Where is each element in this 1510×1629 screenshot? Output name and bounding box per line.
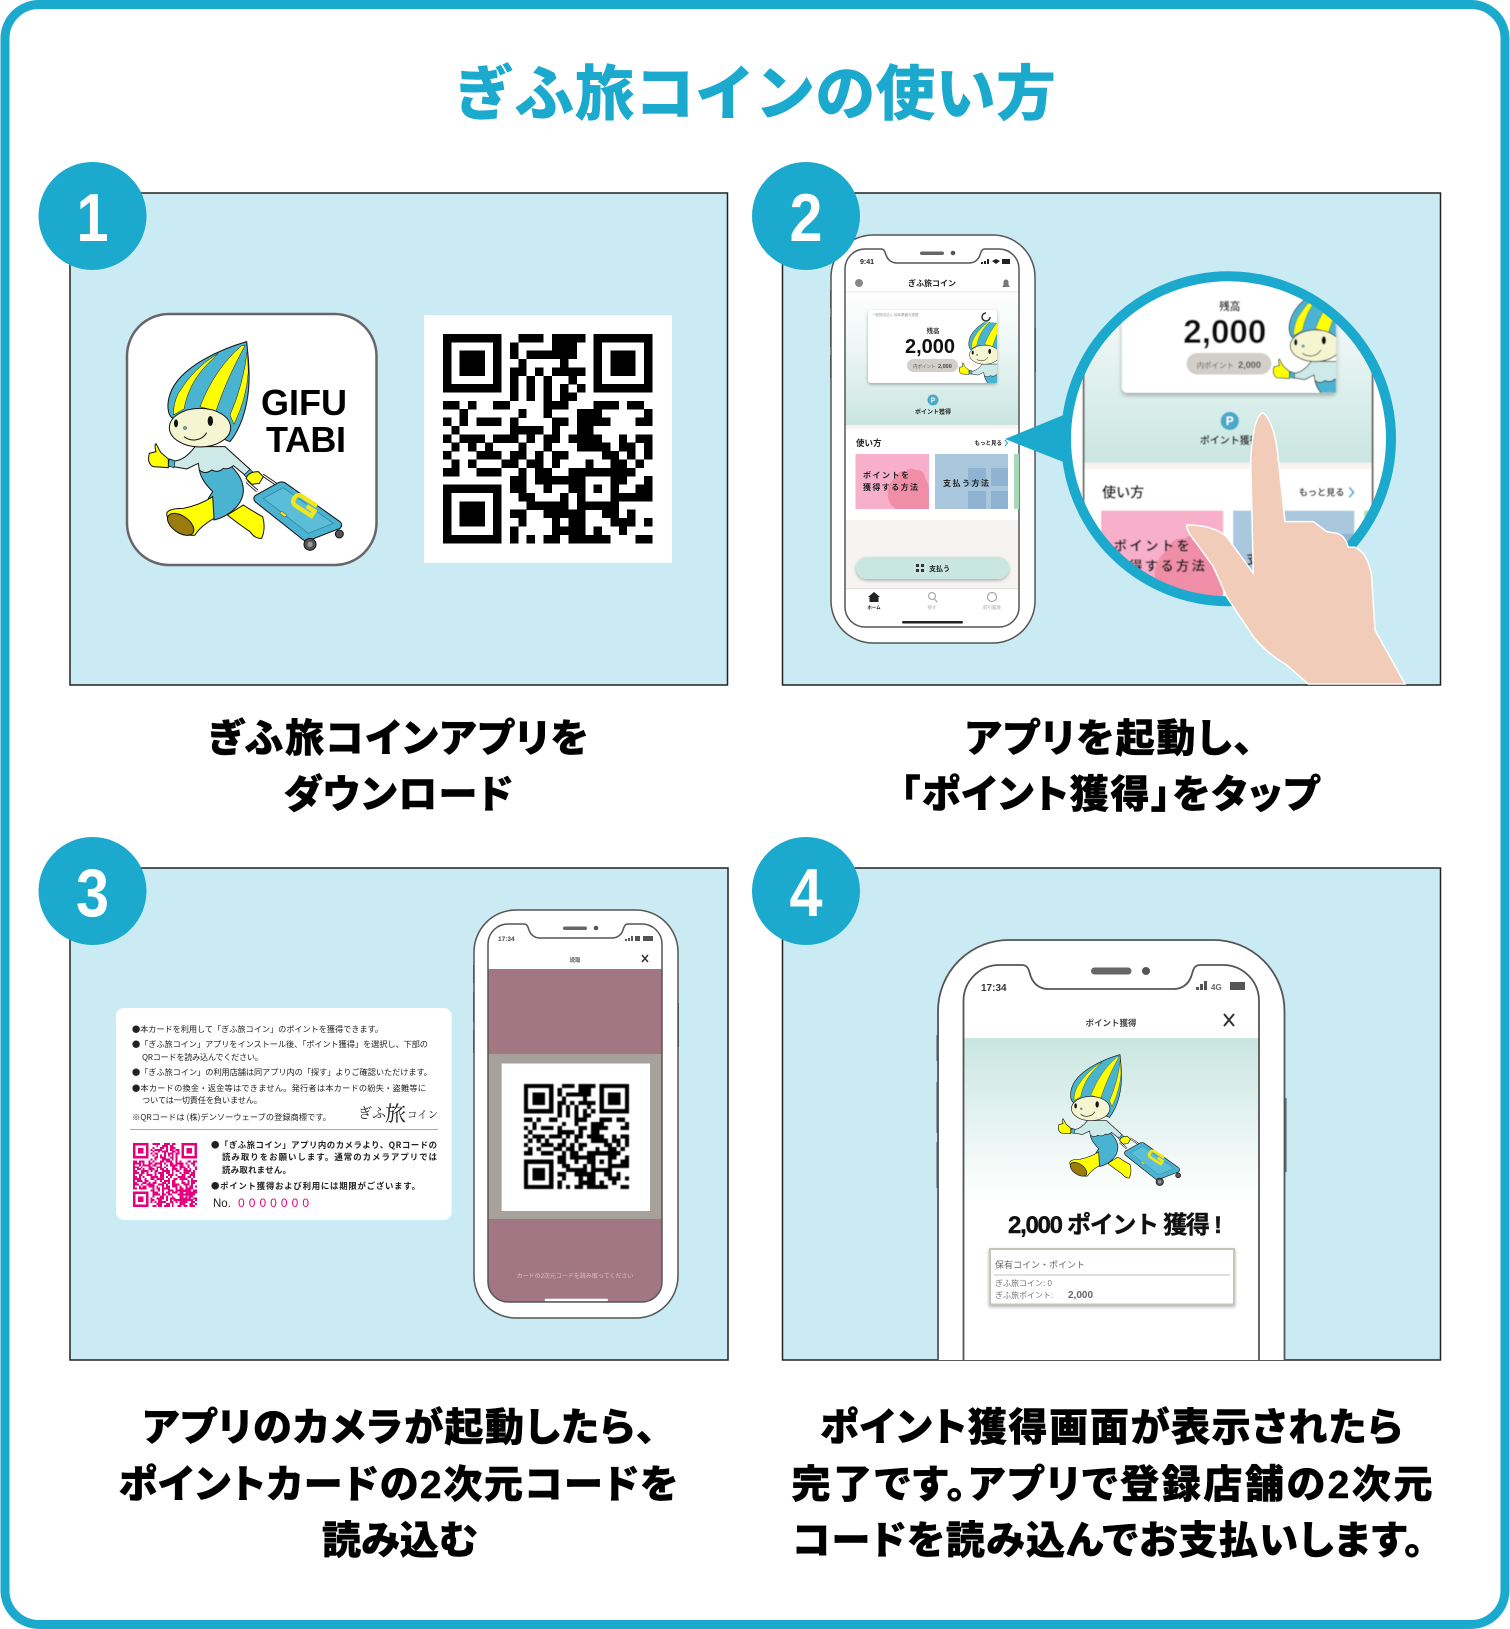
how-to heading: もっと見る — [974, 440, 1002, 447]
circle number 3: 3 — [76, 855, 109, 931]
coin logo: コイン — [407, 1109, 438, 1121]
caption: step 4: 完了です。アプリで登録店舗の2次元 — [792, 1464, 1432, 1507]
bottom navigation: 探す — [928, 604, 937, 611]
balance box: ぎふ旅コイン: 0 — [995, 1278, 1052, 1288]
magnifier callout: ポイントを — [1114, 538, 1190, 553]
icon: hand — [1187, 413, 1405, 684]
balance card — [866, 310, 999, 386]
caption: step 2: アプリを起動し、 — [965, 718, 1253, 761]
balance box: 保有コイン・ポイント — [995, 1259, 1085, 1270]
panel: step 1 — [70, 193, 728, 685]
magnifier callout: 支払う方法 — [1246, 551, 1323, 567]
pay button — [856, 557, 1009, 579]
panel: step 4 — [782, 867, 1442, 1361]
balance card: 残高 — [926, 326, 940, 335]
coin logo — [358, 1102, 438, 1126]
circle number 4: 4 — [790, 855, 823, 931]
caption: step 3: ポイントカードの2次元コードを — [118, 1464, 678, 1507]
caption: step 4 — [792, 1406, 1432, 1563]
card instructions — [211, 1139, 438, 1192]
card instructions: 読み取りをお願いします。通常のカメラアプリでは — [222, 1151, 438, 1163]
card notes: ●本カードの換金・返金等はできません。発行者は本カードの紛失・盗難等に — [132, 1082, 426, 1094]
phone with result — [936, 939, 1286, 1360]
caption: step 1 — [208, 717, 588, 817]
serial number: 0000000 — [238, 1196, 309, 1210]
card notes: ついては一切責任を負いません。 — [142, 1094, 262, 1106]
app name: TABI — [266, 419, 346, 460]
phone with camera: 17:34 — [498, 936, 515, 943]
caption: step 3: アプリのカメラが起動したら、 — [142, 1406, 656, 1450]
points gained: 2,000 ポイント 獲得 ! — [1008, 1212, 1222, 1239]
magnifier callout: 2,000 — [1238, 360, 1261, 370]
card notes: ●「ぎふ旅コイン」の利用店舗は同アプリ内の「探す」よりご確認いただけます。 — [132, 1066, 432, 1078]
card notes — [132, 1023, 432, 1123]
card notes: ●本カードを利用して「ぎふ旅コイン」のポイントを獲得できます。 — [132, 1023, 383, 1035]
magnifier callout: 2,000 — [1183, 314, 1266, 351]
how-to cards — [856, 454, 1019, 509]
circle number 1: 1 — [76, 180, 108, 256]
circle number 4 — [752, 837, 860, 945]
QR code — [424, 315, 672, 563]
mascot — [149, 342, 343, 550]
bottom navigation — [867, 592, 1001, 624]
phone: 9:41 — [860, 259, 874, 266]
phone with camera: 読取 — [569, 956, 581, 964]
phone with result: ポイント獲得 — [1085, 1018, 1137, 1028]
point card — [116, 1008, 452, 1220]
app name: GIFU — [261, 382, 347, 423]
magnifier callout: ポイント獲得 — [1200, 434, 1260, 447]
phone with result: 17:34 — [981, 983, 1007, 994]
pay button: 支払う — [929, 564, 950, 573]
how-to heading — [856, 438, 1008, 448]
mascot — [1058, 1055, 1181, 1186]
how-to cards: 支払う方法 — [943, 478, 989, 488]
phone — [830, 235, 1055, 643]
panel: step 3 — [70, 868, 728, 1360]
card instructions: ●「ぎふ旅コイン」アプリ内のカメラより、QRコードの — [211, 1139, 437, 1151]
balance box: 2,000 — [1068, 1290, 1093, 1301]
magnifier callout — [1005, 271, 1396, 606]
balance card: 2,000 — [905, 336, 955, 358]
magnifier callout: 内ポイント — [1197, 360, 1234, 370]
app name — [261, 382, 347, 460]
bottom navigation: 取引履歴 — [983, 604, 1001, 611]
magnifier callout: 使い方 — [1102, 484, 1144, 500]
button: get points: ポイント獲得 — [915, 408, 951, 416]
circle number 2: 2 — [790, 180, 822, 256]
caption: step 3 — [118, 1406, 678, 1563]
panel: step 2 — [782, 172, 1440, 685]
how-to heading: 使い方 — [856, 438, 882, 448]
circle number 1 — [38, 162, 146, 270]
serial number: No. — [213, 1198, 231, 1210]
how-to cards: ポイントを — [863, 471, 909, 480]
balance box: ぎふ旅ポイント: — [995, 1290, 1053, 1300]
magnifier callout: 獲得する方法 — [1114, 557, 1206, 573]
bottom navigation: ホーム — [867, 604, 881, 610]
caption: step 1: ぎふ旅コインアプリを — [208, 717, 588, 761]
magnifier callout: 残高 — [1219, 300, 1241, 313]
caption: step 2: 「ポイント獲得」をタップ — [900, 774, 1321, 817]
balance card: 2,000 — [938, 364, 952, 370]
card notes: ●「ぎふ旅コイン」アプリをインストール後、「ポイント獲得」を選択し、下部の — [132, 1038, 428, 1050]
magnifier callout: P — [1226, 415, 1234, 428]
balance box — [990, 1249, 1234, 1304]
phone with camera — [474, 910, 678, 1318]
magnifier callout: もっと見る — [1299, 488, 1344, 498]
coin logo: 旅 — [385, 1102, 406, 1126]
caption: step 3: 読み込む — [322, 1520, 478, 1563]
balance card: 一般財団法人 岐阜県観光連盟 — [872, 312, 919, 317]
card instructions: ●ポイント獲得および利用には期限がございます。 — [211, 1180, 420, 1192]
phone: ぎふ旅コイン — [908, 278, 956, 288]
caption: step 2 — [900, 718, 1321, 817]
phone with camera: カードの2次元コードを読み取ってください — [517, 1272, 633, 1280]
phone with result: 4G — [1211, 983, 1222, 992]
card notes: QRコードを読み込んでください。 — [142, 1051, 263, 1063]
card notes: ※QRコードは (株)デンソーウェーブの登録商標です。 — [132, 1111, 331, 1123]
pink QR code — [133, 1143, 197, 1207]
circle number 2 — [752, 162, 860, 270]
title: ぎふ旅コインの使い方 — [454, 61, 1056, 128]
circle number 3 — [38, 837, 146, 945]
how-to cards: 獲得する方法 — [863, 482, 918, 492]
caption: step 4: ポイント獲得画面が表示されたら — [820, 1406, 1402, 1450]
caption: step 4: コードを読み込んでお支払いします。 — [792, 1520, 1424, 1563]
button: get points: P — [931, 398, 936, 404]
balance card: 内ポイント — [913, 363, 936, 370]
app icon — [127, 314, 376, 565]
card instructions: 読み取れません。 — [222, 1164, 291, 1176]
coin logo: ぎふ — [358, 1106, 386, 1122]
caption: step 1: ダウンロード — [284, 773, 512, 817]
button: get points — [915, 394, 951, 416]
